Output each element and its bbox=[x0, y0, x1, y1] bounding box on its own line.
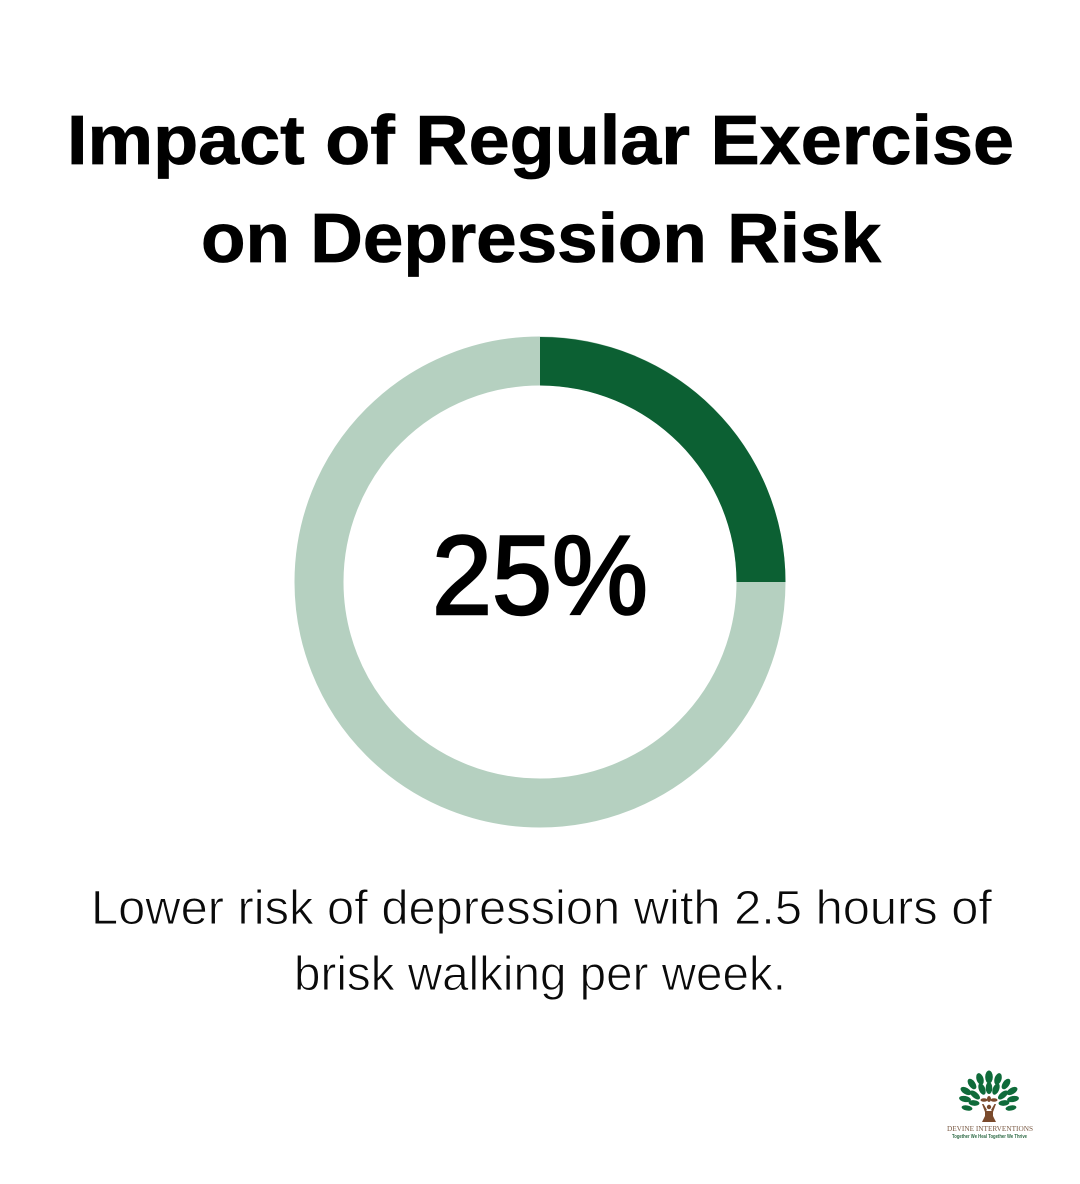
logo: Devine Interventions bbox=[947, 1070, 1033, 1140]
caption bbox=[91, 882, 993, 1001]
title bbox=[67, 101, 1014, 277]
donut chart: 25% bbox=[319, 337, 786, 803]
title: Impact of Regular Exercise bbox=[67, 101, 1014, 179]
center value: 25% bbox=[432, 513, 648, 638]
caption: brisk walking per week. bbox=[294, 948, 786, 1001]
caption: Lower risk of depression with 2.5 hours of bbox=[91, 882, 993, 935]
logo name: DEVINE INTERVENTIONS bbox=[947, 1125, 1033, 1133]
logo tagline: Together We Heal Together We Thrive bbox=[952, 1134, 1027, 1140]
icon: tree canopy bbox=[959, 1070, 1019, 1112]
donut highlighted segment bbox=[540, 337, 786, 582]
icon: tree trunk figure bbox=[980, 1096, 998, 1122]
donut track bbox=[319, 361, 761, 803]
title: on Depression Risk bbox=[201, 199, 881, 277]
